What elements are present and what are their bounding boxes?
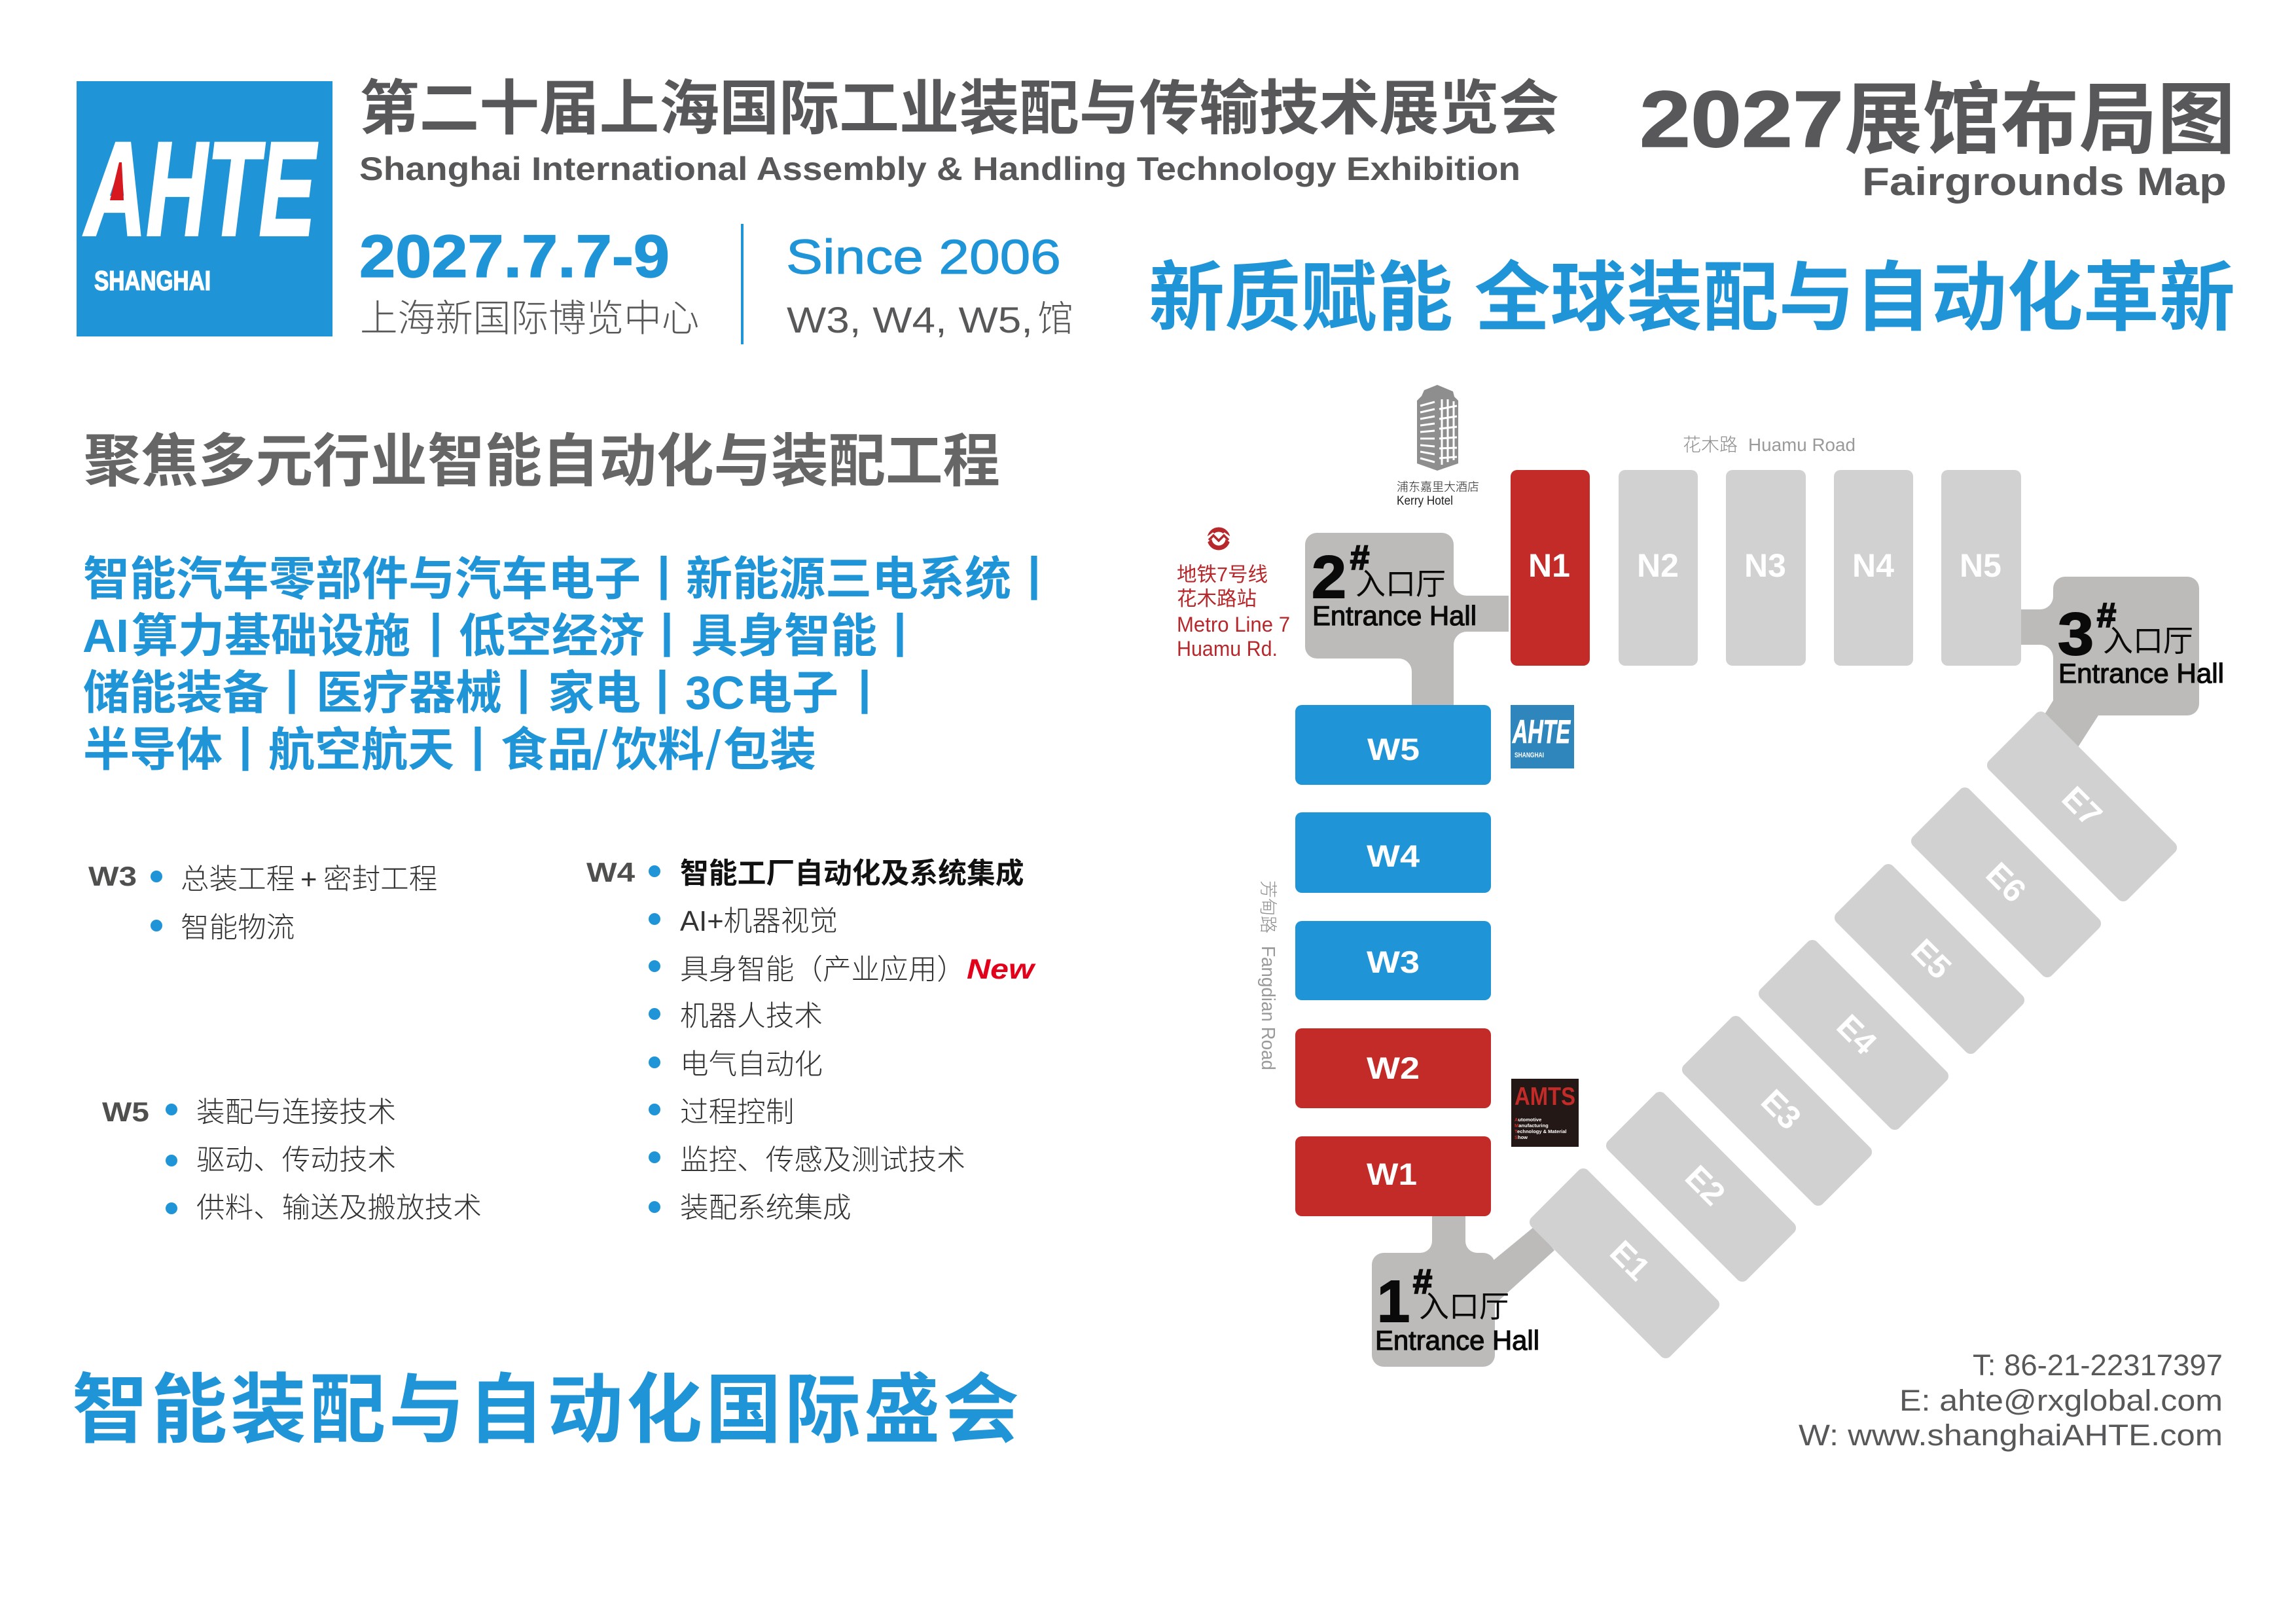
hotel label: [1397, 480, 1479, 508]
entrance hall 1: 1: [1377, 1269, 1410, 1335]
W4 exhibit list: W4: [586, 857, 636, 888]
W3 exhibit list: 密封工程: [323, 864, 437, 895]
metro label: 花木路站: [1177, 588, 1257, 610]
industries list: [82, 549, 1041, 781]
industries list: |: [239, 719, 252, 771]
road label: Fangdian Road: 芳甸路: [1258, 880, 1278, 933]
halls used: W3, W4, W5,: [787, 299, 1033, 340]
hall N3: N3: [1744, 547, 1786, 584]
W3 exhibit list: 总装工程: [181, 864, 295, 895]
industries list: 储能装备: [83, 668, 269, 719]
road label: Huamu Road: Huamu Road: [1748, 435, 1856, 455]
entrance hall 2: #: [1350, 539, 1369, 577]
AMTS logo: [1511, 1079, 1579, 1147]
road label: Huamu Road: 花木路: [1683, 435, 1738, 455]
industries list: 低空经济: [459, 611, 645, 662]
AMTS logo: AMTS: [1515, 1083, 1575, 1111]
entrance hall 3: 入口厅: [2103, 624, 2193, 658]
hall W1: W1: [1367, 1157, 1417, 1191]
industries list: 半导体: [83, 725, 223, 776]
date: 2027.7.7-9: [359, 223, 670, 290]
industries list: |: [858, 662, 871, 714]
hall N5: [1941, 470, 2021, 666]
industries list: 家电: [548, 668, 641, 719]
industries list: 医疗器械: [316, 668, 502, 719]
slogan: 新质赋能 全球装配与自动化革新: [1149, 255, 2235, 340]
industries list: AI: [82, 611, 129, 662]
W4 exhibit list: 具身智能（产业应用）: [680, 954, 965, 986]
hall W2: W2: [1367, 1051, 1420, 1085]
industries list: |: [656, 662, 669, 714]
entrance hall 2: 2: [1312, 544, 1346, 611]
contact details: E: ahte@rxglobal.com: [1899, 1384, 2223, 1417]
metro label: Metro Line 7: [1177, 613, 1290, 636]
hall N3: [1726, 470, 1806, 666]
industries list: |: [1028, 549, 1041, 600]
industries list: 具身智能: [691, 611, 877, 662]
hall W4: [1295, 812, 1491, 893]
industries heading: 聚焦多元行业智能自动化与装配工程: [84, 429, 1000, 494]
map title: 2027: [1640, 75, 1844, 164]
hall W3: W3: [1367, 945, 1420, 979]
W3 exhibit list: 智能物流: [181, 912, 295, 944]
industries list: |: [471, 719, 484, 771]
hall E5: E5: [1904, 932, 1958, 986]
hall E5: [1832, 861, 2027, 1056]
industries list: |: [285, 662, 298, 714]
W5 exhibit list: [102, 1096, 482, 1224]
entrance hall 3: [2016, 577, 2224, 772]
hall E7: [1984, 709, 2179, 904]
industries list: |: [429, 605, 442, 657]
industries list: 智能汽车零部件与汽车电子: [83, 554, 641, 605]
W5 exhibit list: 驱动、传动技术: [196, 1145, 396, 1176]
hall E3: [1679, 1013, 1874, 1208]
contact details: [1799, 1348, 2223, 1452]
since 2006: Since 2006: [786, 230, 1061, 284]
W4 exhibit list: 监控、传感及测试技术: [680, 1145, 965, 1176]
map title: [1640, 75, 2236, 164]
contact details: T: 86-21-22317397: [1973, 1348, 2223, 1382]
W5 exhibit list: 装配与连接技术: [196, 1097, 396, 1128]
metro label: Huamu Rd.: [1177, 637, 1278, 660]
small AHTE logo: AHTE: [1512, 713, 1571, 750]
AMTS logo: Manufacturing: [1515, 1123, 1549, 1128]
map subtitle: Fairgrounds Map: [1862, 160, 2227, 204]
entrance hall 2: Entrance Hall: [1312, 600, 1477, 631]
W4 exhibit list: New: [967, 954, 1036, 985]
hall N2: N2: [1637, 547, 1679, 584]
entrance hall 1: Entrance Hall: [1375, 1325, 1539, 1356]
entrance hall 3: Entrance Hall: [2058, 658, 2224, 689]
W3 exhibit list: +: [300, 864, 317, 895]
W4 exhibit list: 智能工厂自动化及系统集成: [680, 857, 1024, 890]
road label: Fangdian Road: [1257, 880, 1278, 1070]
halls used: 馆: [1037, 298, 1073, 339]
hall W3: [1295, 921, 1491, 1000]
road label: Huamu Road: [1683, 435, 1856, 455]
metro label: 地铁7号线: [1177, 564, 1268, 586]
W5 exhibit list: W5: [102, 1096, 149, 1127]
divider line: [741, 224, 744, 344]
W4 exhibit list: 过程控制: [680, 1097, 794, 1128]
hall E3: E3: [1754, 1082, 1808, 1136]
entrance hall 3: #: [2096, 596, 2116, 635]
industries list: /: [706, 719, 721, 781]
entrance hall 2: [1305, 533, 1509, 707]
entrance hall 1: 入口厅: [1419, 1290, 1509, 1324]
W4 exhibit list: 装配系统集成: [680, 1193, 852, 1224]
small AHTE logo: [1511, 705, 1574, 768]
hall E2: [1604, 1089, 1799, 1284]
W5 exhibit list: 供料、输送及搬放技术: [196, 1193, 482, 1224]
entrance hall 1: [1372, 1211, 1554, 1367]
hall E1: E1: [1603, 1233, 1657, 1288]
industries list: 3C: [685, 668, 745, 719]
industries list: 算力基础设施: [132, 611, 410, 662]
hall E1: [1527, 1166, 1722, 1361]
hall W5: [1295, 705, 1491, 785]
hall E7: E7: [2055, 780, 2109, 833]
icon: metro logo: [1206, 530, 1232, 548]
W3 exhibit list: [88, 861, 437, 944]
bottom slogan: 智能装配与自动化国际盛会: [72, 1367, 1019, 1453]
industries list: 食品: [501, 725, 594, 776]
hall N4: [1834, 470, 1913, 666]
subtitle: English exhibition name: Shanghai International Assembly & Handling Technology Exhibition: [359, 151, 1520, 187]
logo: AHTE Shanghai: SHANGHAI: [94, 265, 211, 296]
hall E6: [1909, 785, 2104, 980]
hotel label: Kerry Hotel: [1397, 494, 1453, 508]
W3 exhibit list: W3: [88, 861, 137, 892]
entrance hall 2: 入口厅: [1355, 567, 1446, 601]
road label: Fangdian Road: Fangdian Road: [1257, 946, 1278, 1070]
hall N1: [1511, 470, 1590, 666]
hotel label: 浦东嘉里大酒店: [1397, 480, 1479, 494]
metro label: [1177, 564, 1290, 660]
industries list: |: [517, 662, 530, 714]
hall W4: W4: [1367, 839, 1420, 873]
industries list: |: [893, 605, 906, 657]
small AHTE logo: SHANGHAI: [1515, 751, 1544, 759]
entrance hall 1: #: [1412, 1263, 1432, 1301]
logo: AHTE Shanghai: [77, 81, 332, 336]
AMTS logo: Automotive: [1515, 1117, 1541, 1123]
hall E2: E2: [1678, 1158, 1732, 1212]
hall N4: N4: [1852, 547, 1894, 584]
industries list: |: [660, 605, 673, 657]
logo: AHTE Shanghai: AHTE: [83, 115, 318, 264]
contact details: W: www.shanghaiAHTE.com: [1799, 1418, 2223, 1452]
industries list: 饮料: [611, 725, 704, 776]
hall E4: E4: [1830, 1007, 1884, 1062]
hall N1: N1: [1528, 547, 1570, 584]
industries list: /: [592, 719, 608, 781]
W4 exhibit list: [586, 857, 1036, 1224]
map title: 展馆布局图: [1844, 77, 2236, 164]
W4 exhibit list: AI+机器视觉: [680, 906, 838, 937]
industries list: 航空航天: [268, 725, 454, 776]
industries list: 包装: [723, 725, 816, 776]
venue: 上海新国际博览中心: [360, 298, 699, 340]
W4 exhibit list: 机器人技术: [680, 1001, 823, 1032]
entrance hall 3: 3: [2058, 601, 2094, 668]
industries list: 新能源三电系统: [686, 554, 1011, 605]
W4 exhibit list: 电气自动化: [680, 1049, 823, 1081]
title: Chinese exhibition name: 第二十届上海国际工业装配与传输技术展览会: [359, 76, 1559, 142]
hall N5: N5: [1960, 547, 2001, 584]
hall E4: [1756, 937, 1951, 1132]
hall N2: [1619, 470, 1698, 666]
hall E6: E6: [1979, 856, 2033, 909]
industries list: |: [657, 549, 670, 600]
hall W5: W5: [1367, 732, 1420, 767]
AMTS logo: Technology & Material: [1515, 1128, 1566, 1134]
hall W1: [1295, 1136, 1491, 1216]
icon: Kerry Hotel building: [1417, 385, 1458, 471]
AMTS logo: Show: [1515, 1134, 1528, 1140]
hall W2: [1295, 1028, 1491, 1108]
industries list: 电子: [745, 668, 838, 719]
